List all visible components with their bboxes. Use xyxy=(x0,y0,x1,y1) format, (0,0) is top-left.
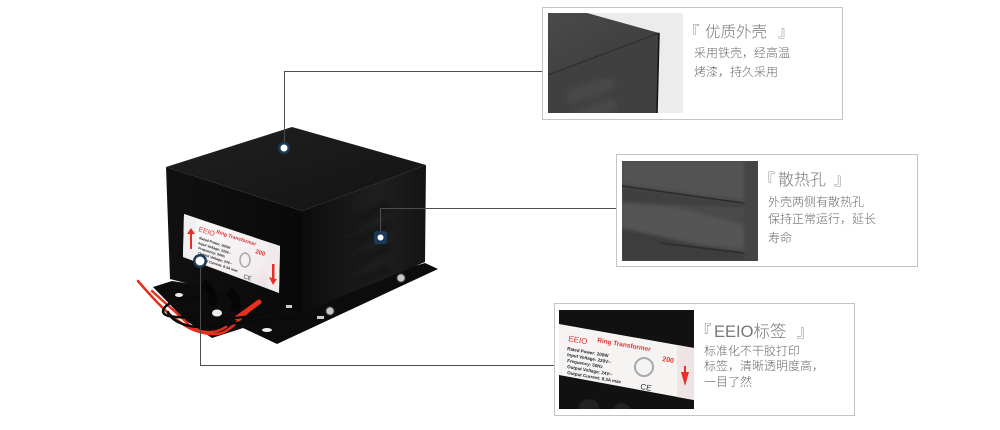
spec label: Rated Power: 200W xyxy=(199,236,231,250)
panel: shell xyxy=(542,8,842,120)
case top face xyxy=(166,127,426,211)
spec label: 200 xyxy=(254,249,266,258)
spec label: CE xyxy=(242,274,252,282)
vent slots xyxy=(347,206,385,288)
description: 外壳两侧有散热孔 xyxy=(768,195,864,209)
connector lines xyxy=(200,72,616,366)
case right face xyxy=(302,165,426,313)
photo: label closeup: CE xyxy=(640,382,652,393)
description: 一目了然 xyxy=(704,375,752,389)
description: 烤漆，持久采用 xyxy=(694,65,778,79)
photo: label closeup xyxy=(559,310,694,409)
photo: label closeup: Output Current: 8.3A max xyxy=(567,370,622,385)
panel: vents xyxy=(616,154,918,266)
spec label: Input Voltage: 220V~ xyxy=(198,241,232,256)
description: 标准化不干胶打印 xyxy=(704,343,800,358)
photo: label closeup: Ring Transformer xyxy=(597,337,652,353)
heading: 散热孔 xyxy=(778,171,826,189)
heading: 『 xyxy=(759,171,775,189)
plate holes xyxy=(175,293,272,332)
photo: label closeup: Input Voltage: 220V~ xyxy=(567,352,611,365)
hotspot: label xyxy=(193,254,207,268)
heading: 』 xyxy=(834,172,850,189)
spec label: Output Voltage: 24V~ xyxy=(198,251,232,266)
photo: label closeup: Rated Power: 200W xyxy=(567,346,610,358)
description: 保持正常运行，延长 xyxy=(768,212,876,226)
hotspot: shell xyxy=(278,142,290,154)
description xyxy=(694,46,790,79)
spec label: EEIO xyxy=(197,226,216,238)
description: 采用铁壳，经高温 xyxy=(694,46,790,60)
red wires xyxy=(138,281,259,334)
heading: 优质外壳 xyxy=(705,23,767,41)
description: 寿命 xyxy=(768,230,792,245)
heading: 』 xyxy=(778,24,794,41)
panel frame xyxy=(554,304,854,416)
coils xyxy=(203,283,236,311)
photo: label closeup: Output Voltage: 24V~ xyxy=(567,364,613,377)
base plate xyxy=(153,263,438,344)
hotspot: vents xyxy=(374,231,387,244)
spec label: Output Current: 8.3A max xyxy=(197,256,238,273)
product photo: transformer xyxy=(138,127,438,344)
case left face xyxy=(166,167,302,313)
panel frame xyxy=(542,8,842,120)
panel frame xyxy=(616,154,918,266)
spec label: Ring Transformer xyxy=(215,229,257,248)
description xyxy=(704,343,824,389)
heading: 『 xyxy=(695,322,712,341)
panel: label xyxy=(554,304,854,421)
photo: label closeup: Frequency: 50Hz xyxy=(567,358,604,369)
description: 标签，清晰透明度高， xyxy=(704,359,824,373)
heading: 』 xyxy=(797,323,814,341)
heading: 『 xyxy=(684,23,700,41)
photo: label closeup: 200 xyxy=(662,356,674,365)
wire tips xyxy=(286,305,324,319)
photo: vents closeup xyxy=(622,161,758,261)
photo: shell corner xyxy=(548,13,683,118)
spec label: Frequency: 50Hz xyxy=(198,246,226,259)
heading: EEIO标签 xyxy=(714,322,786,341)
description xyxy=(768,195,876,245)
photo: label closeup: EEIO xyxy=(568,334,588,346)
black wires xyxy=(163,297,320,327)
screws xyxy=(326,274,405,315)
spec label xyxy=(183,214,280,293)
